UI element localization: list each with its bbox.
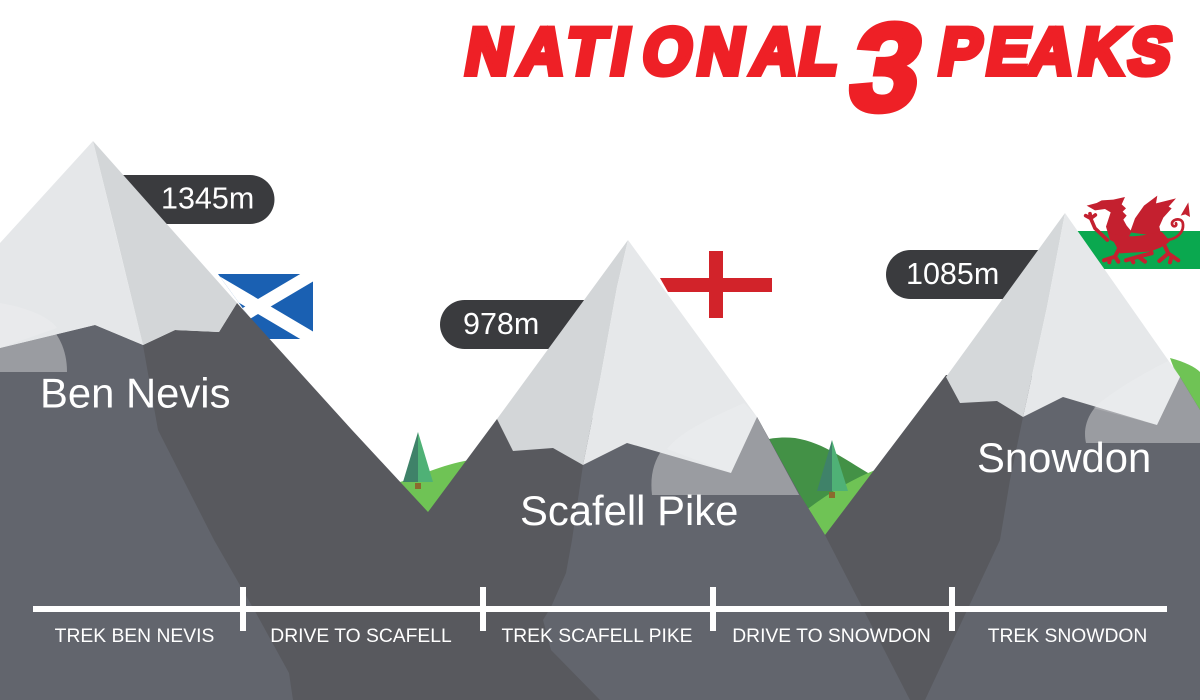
timeline stage labels (55, 626, 1147, 647)
snow cap: Snowdon (946, 213, 1180, 425)
altitude pill: Snowdon: 1085m (906, 257, 999, 291)
title numeral: 3: 3 (840, 0, 934, 137)
altitude pill: Scafell Pike (440, 300, 588, 349)
cloud: Snowdon (1085, 368, 1200, 443)
title word: Peaks: PEAKS (934, 14, 1178, 88)
hill: light green mid valley (800, 468, 880, 538)
cloud: Ben Nevis (0, 334, 67, 372)
snow cap: Scafell Pike (497, 240, 757, 473)
snow cap: Ben Nevis (0, 141, 237, 348)
timeline ticks (240, 587, 955, 631)
timeline stage labels: TREK SNOWDON (988, 626, 1147, 647)
mountain range base (0, 303, 1200, 700)
hill: light green right (1170, 358, 1200, 420)
flag: Wales (1070, 196, 1200, 269)
timeline stage labels: DRIVE TO SCAFELL (270, 626, 452, 647)
flag: Scotland (218, 274, 313, 339)
hill: light green left valley (400, 460, 470, 515)
timeline stage labels: DRIVE TO SNOWDON (732, 626, 931, 647)
cloud: Scafell Pike (652, 417, 799, 495)
timeline (33, 587, 1167, 647)
icon: tree left (403, 432, 433, 489)
mountain face: Scafell Pike lit side (543, 417, 910, 700)
altitude pill: Scafell Pike: 978m (463, 307, 539, 341)
label: Ben Nevis: Ben Nevis (40, 370, 230, 416)
altitude pill: Ben Nevis (119, 175, 274, 224)
flag: England (660, 251, 772, 318)
timeline stage labels: TREK SCAFELL PIKE (501, 626, 693, 647)
label: Scafell Pike: Scafell Pike (520, 487, 738, 534)
mountain face: Snowdon lit side (925, 377, 1200, 700)
icon: red dragon (1086, 196, 1190, 262)
title word: National: NATIONAL (460, 14, 845, 88)
hill: dark green (745, 438, 880, 540)
label: Snowdon: Snowdon (977, 434, 1151, 481)
altitude pill: Snowdon (886, 250, 1042, 299)
title: National 3 Peaks (460, 0, 1178, 137)
timeline stage labels: TREK BEN NEVIS (55, 626, 214, 647)
mountain face: Ben Nevis lit side (0, 325, 293, 700)
altitude pill: Ben Nevis: 1345m (161, 182, 254, 216)
icon: tree right (817, 440, 848, 498)
timeline bar (33, 606, 1167, 612)
